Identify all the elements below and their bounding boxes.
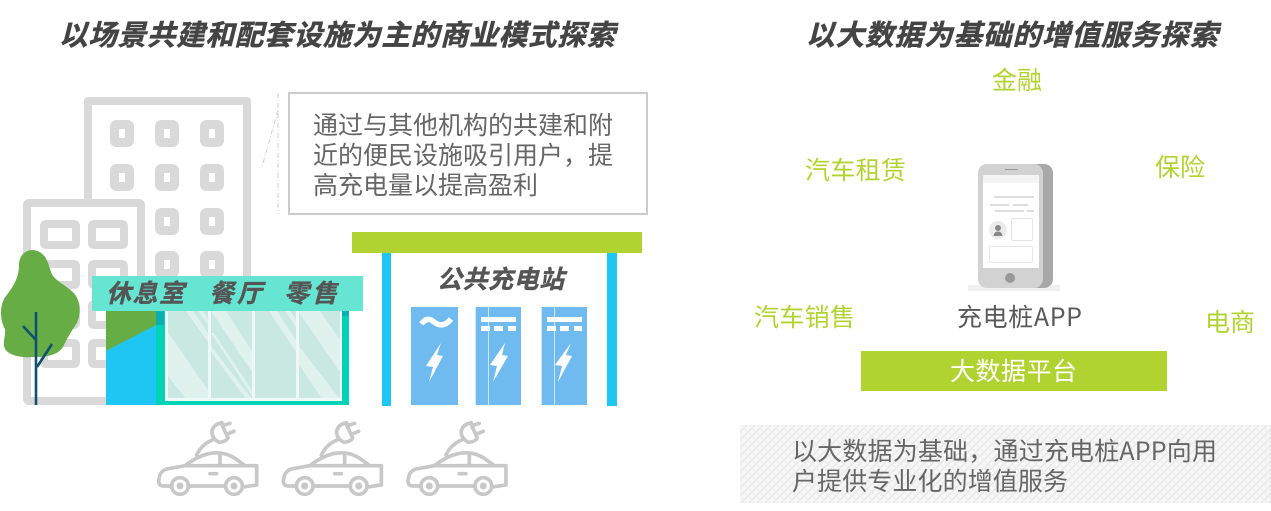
panel: bottom summary: 户提供专业化的增值服务 bbox=[792, 462, 1068, 498]
charging station bbox=[352, 232, 642, 406]
store sign: 休息室 bbox=[106, 274, 188, 310]
tall building bbox=[88, 101, 247, 405]
store sign: 零售 bbox=[284, 274, 340, 310]
icon: electric car 3 bbox=[408, 423, 506, 494]
store front bbox=[156, 311, 349, 405]
icon: tree bbox=[1, 250, 80, 405]
small building windows bbox=[44, 224, 124, 364]
panel: bottom summary bbox=[740, 425, 1271, 503]
callout connector bbox=[262, 93, 278, 214]
panel: bottom summary: 以大数据为基础，通过充电桩APP向用 bbox=[792, 432, 1217, 468]
window frames bbox=[165, 311, 342, 401]
label: finance: 金融 bbox=[992, 61, 1042, 97]
label: charging pile app: 充电桩APP bbox=[957, 298, 1082, 334]
panel: callout text box: 通过与其他机构的共建和附 bbox=[313, 106, 613, 142]
store sign: 餐厅 bbox=[209, 274, 266, 310]
station pillars bbox=[382, 253, 617, 406]
big data platform bar: 大数据平台 bbox=[950, 352, 1077, 388]
icon: phone bbox=[968, 164, 1060, 291]
charger 2 bbox=[475, 307, 521, 405]
tall building windows bbox=[114, 124, 220, 274]
label: insurance: 保险 bbox=[1155, 148, 1205, 184]
station name: 公共充电站 bbox=[437, 260, 568, 296]
station roof bbox=[352, 232, 642, 253]
tree trunk bbox=[23, 312, 52, 405]
icon: electric car 2 bbox=[283, 423, 381, 494]
label: car sales: 汽车销售 bbox=[754, 298, 855, 334]
title: left heading: 以场景共建和配套设施为主的商业模式探索 bbox=[59, 13, 618, 54]
panel: callout text box bbox=[289, 93, 647, 214]
title: right heading: 以大数据为基础的增值服务探索 bbox=[806, 13, 1221, 54]
store wall bbox=[106, 311, 156, 405]
charger 1 bbox=[411, 307, 458, 405]
charger 3 bbox=[541, 307, 587, 405]
panel: callout text box: 高充电量以提高盈利 bbox=[313, 166, 538, 202]
glass panes bbox=[165, 311, 340, 399]
label: car rental: 汽车租赁 bbox=[805, 151, 906, 187]
small building bbox=[27, 203, 141, 401]
store sign bbox=[92, 274, 363, 311]
label: e-commerce: 电商 bbox=[1205, 303, 1255, 339]
big data platform bar bbox=[861, 351, 1167, 391]
icon: electric car 1 bbox=[159, 423, 257, 494]
panel: callout text box: 近的便民设施吸引用户，提 bbox=[313, 136, 613, 172]
